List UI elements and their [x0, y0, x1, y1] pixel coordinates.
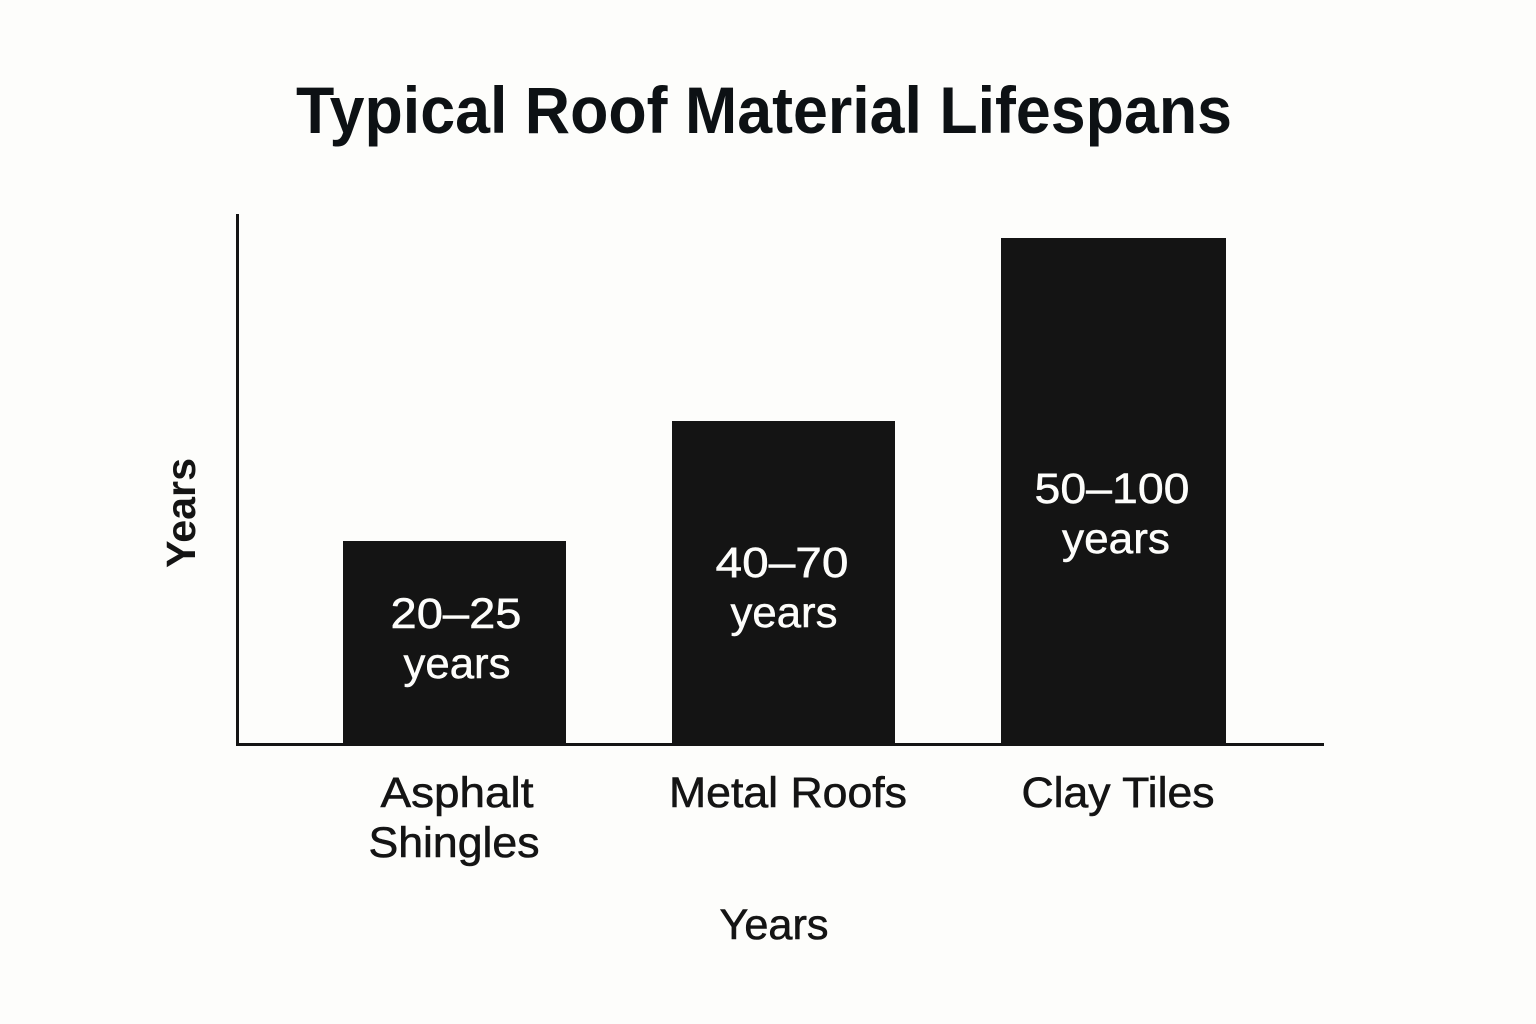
category label: clay tiles: Clay Tiles: [1022, 769, 1214, 817]
y axis label: Years: [158, 458, 204, 568]
bar: asphalt shingles: [343, 541, 566, 744]
category label: asphalt shingles: [368, 769, 540, 867]
y axis line: [236, 214, 239, 746]
bar: asphalt shingles: 20–25: [390, 590, 522, 638]
bar: clay tiles: years: [1062, 515, 1170, 563]
bar: metal roofs: 40–70: [716, 539, 848, 587]
x axis label: Years: [720, 901, 828, 949]
title: Typical Roof Material Lifespans: [296, 73, 1232, 147]
bar: asphalt shingles: years: [404, 640, 510, 688]
x axis line: [236, 743, 1324, 746]
bar: clay tiles: 50–100: [1034, 465, 1190, 513]
bar: metal roofs: [672, 421, 895, 744]
category label: asphalt shingles: Asphalt: [380, 769, 534, 817]
bar: clay tiles: [1001, 238, 1226, 744]
bar: metal roofs: years: [730, 589, 838, 637]
category label: metal roofs: Metal Roofs: [669, 769, 907, 817]
category label: asphalt shingles: Shingles: [368, 819, 540, 867]
